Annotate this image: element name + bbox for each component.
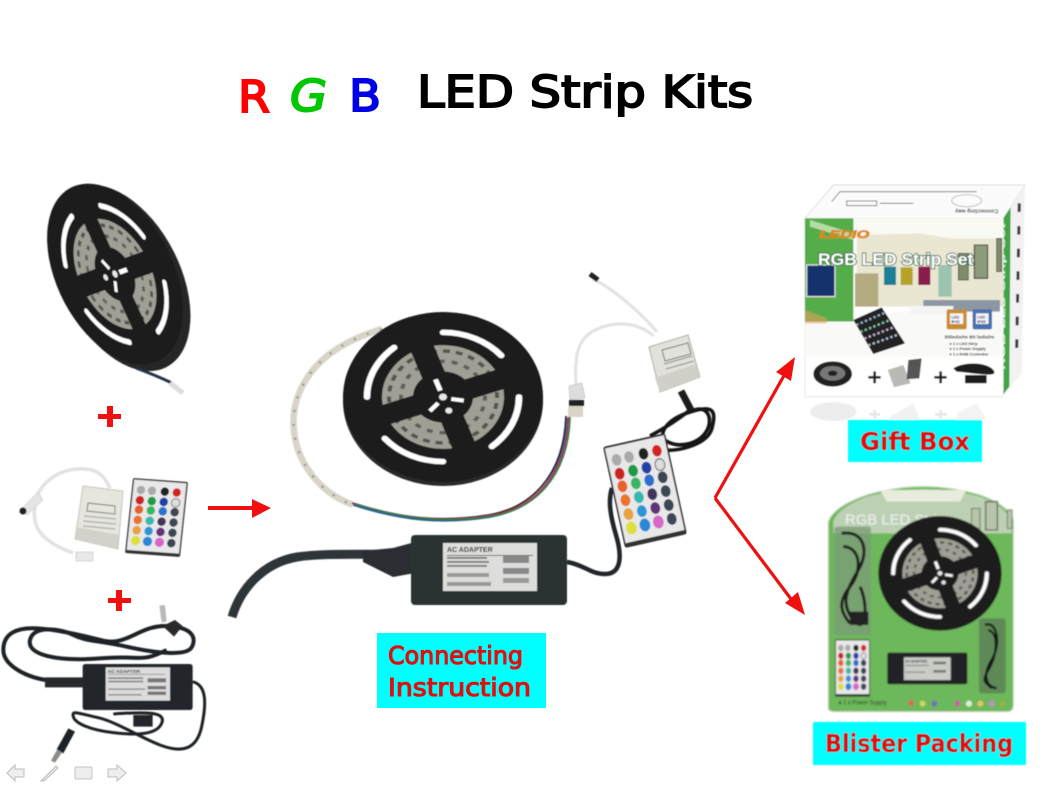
icon: next arrow xyxy=(108,765,126,781)
AC adapter xyxy=(411,535,567,605)
title letter G: G xyxy=(290,71,327,122)
controller xyxy=(649,335,700,410)
IP badges: LED xyxy=(951,314,959,319)
IP badges: LED xyxy=(977,314,985,319)
thin cable xyxy=(979,618,1006,693)
icon: menu xyxy=(75,767,92,779)
AC adapter: AC ADAPTER xyxy=(447,547,493,554)
product name: RGB LED Strip xyxy=(845,513,945,529)
product name: RGB LED Strip Set xyxy=(818,250,974,269)
power adapter, left xyxy=(3,605,205,763)
icon: pen xyxy=(41,766,58,781)
connected kit, centre xyxy=(232,274,714,617)
power adapter, left: AC ADAPTER xyxy=(108,669,141,675)
label: gift box xyxy=(848,420,982,462)
label: blister packing xyxy=(813,722,1026,765)
RGB wire xyxy=(352,416,570,521)
brand logo: LEDIO xyxy=(819,229,870,241)
text: Blister Packing xyxy=(825,729,1013,758)
navigation icons xyxy=(7,765,126,781)
colour dots xyxy=(908,700,1004,707)
text line 1: Connecting xyxy=(388,641,523,670)
remote xyxy=(603,433,687,548)
plus sign 1 xyxy=(98,406,121,427)
box top: Connecting way xyxy=(954,207,998,213)
arrow to gift box and blister xyxy=(715,357,805,615)
controller and remote, left xyxy=(20,469,188,561)
remote photo xyxy=(853,307,905,354)
contents list: ● 1 x RGB Controller xyxy=(949,351,989,356)
density note: 30leds/m 60 leds/m xyxy=(944,334,995,340)
title letter R: R xyxy=(238,72,270,123)
plus sign 2 xyxy=(108,590,131,611)
LED strip tail xyxy=(294,329,382,505)
power cord xyxy=(834,527,871,635)
text line 2: Instruction xyxy=(388,673,531,702)
LED strip reel, left xyxy=(20,162,219,394)
connector and white wires xyxy=(568,274,657,417)
caption strips: ● 1 x Power Supply xyxy=(838,700,887,706)
adapter: AC ADAPTER xyxy=(905,660,928,664)
icon: previous arrow xyxy=(7,765,24,781)
black cable loops xyxy=(650,409,714,450)
IP badges xyxy=(947,309,992,329)
IP badges: IP20 xyxy=(951,319,960,324)
arrow to kit xyxy=(208,499,271,518)
reel xyxy=(861,500,1019,647)
contents list: ● 1 x LED Strip xyxy=(949,341,978,346)
product row xyxy=(813,358,994,387)
blister card xyxy=(828,487,1013,712)
contents list: ● 1 x Power Supply xyxy=(949,346,987,351)
IP badges: IP65 xyxy=(977,319,986,324)
box right side xyxy=(998,185,1025,397)
box front face xyxy=(805,218,1003,397)
blister pack xyxy=(828,487,1019,712)
text: Gift Box xyxy=(860,427,970,456)
adapter xyxy=(887,653,967,684)
title letter B: B xyxy=(349,71,381,122)
reel xyxy=(315,288,571,506)
title xyxy=(238,67,753,123)
remote xyxy=(835,639,870,697)
box top xyxy=(805,185,1025,218)
contents list xyxy=(949,341,989,356)
box reflection xyxy=(810,402,987,421)
power cable xyxy=(232,488,620,617)
title text: LED Strip Kits xyxy=(417,67,753,118)
gift box xyxy=(805,185,1026,765)
box right side: RGB LED Strip Set xyxy=(998,223,1007,370)
label: connecting instruction xyxy=(377,633,546,708)
room backdrop xyxy=(833,489,1012,533)
